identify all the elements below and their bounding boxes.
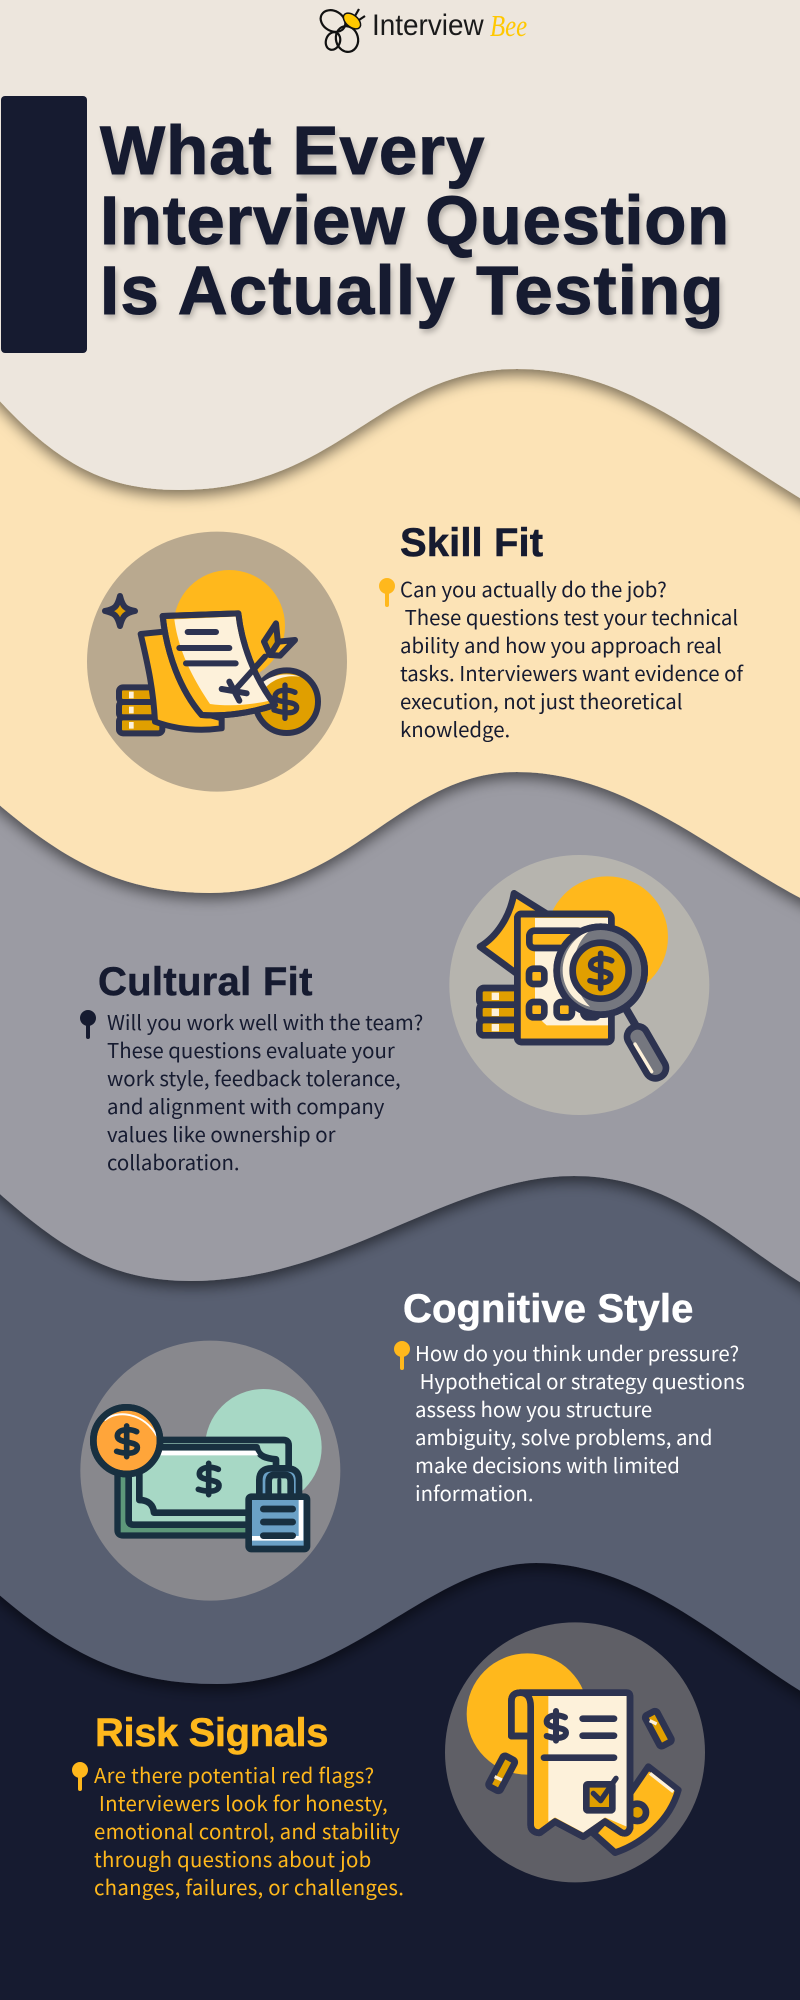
icon: pin — [394, 1341, 410, 1370]
icon: calculator with magnifier — [450, 855, 710, 1115]
title: Interview Question — [100, 182, 730, 259]
body text: Interviewers look for honesty, — [99, 1787, 388, 1817]
icon: bee — [320, 8, 366, 53]
panel: cognitive style — [80, 1287, 745, 1601]
body text: changes, failures, or challenges. — [94, 1871, 404, 1901]
body text: Can you actually do the job? — [400, 573, 667, 603]
body text — [94, 1759, 404, 1901]
body text: work style, feedback tolerance, — [107, 1062, 401, 1092]
body text: ambiguity, solve problems, and — [415, 1421, 713, 1451]
icon: pin — [72, 1762, 88, 1791]
title — [99, 112, 730, 336]
body text: assess how you structure — [415, 1393, 652, 1423]
icon: banknote with lock — [80, 1340, 340, 1601]
heading: Cultural Fit — [98, 960, 313, 1004]
heading: Cognitive Style — [403, 1287, 693, 1331]
body text: How do you think under pressure? — [415, 1337, 739, 1367]
body text: Hypothetical or strategy questions — [420, 1365, 745, 1395]
body text: knowledge. — [400, 713, 510, 743]
body text: execution, not just theoretical — [400, 685, 683, 715]
title accent bar — [1, 96, 87, 353]
panel: cultural fit — [80, 855, 710, 1176]
heading: Skill Fit — [400, 521, 543, 565]
body text: and alignment with company — [107, 1090, 384, 1120]
body text: emotional control, and stability — [94, 1815, 400, 1845]
body text: information. — [415, 1477, 534, 1507]
logo — [320, 8, 527, 53]
body text: These questions test your technical — [405, 601, 738, 631]
title: What Every — [100, 112, 485, 189]
icon: receipt with checkbox — [445, 1622, 705, 1882]
body text — [400, 573, 744, 743]
body text: These questions evaluate your — [107, 1034, 395, 1064]
panel: skill fit — [87, 521, 744, 792]
title: Is Actually Testing — [100, 252, 725, 329]
logo wordmark: Interview — [372, 9, 484, 42]
heading: Risk Signals — [95, 1711, 328, 1755]
body text: collaboration. — [107, 1146, 240, 1176]
icon: pin — [80, 1010, 96, 1039]
panel: risk signals — [72, 1622, 705, 1901]
body text — [107, 1006, 423, 1176]
body text: Will you work well with the team? — [107, 1006, 423, 1036]
icon: pin — [379, 578, 395, 607]
body text: ability and how you approach real — [400, 629, 722, 659]
body text: tasks. Interviewers want evidence of — [400, 657, 743, 687]
icon: document with arrow and coins — [87, 532, 347, 792]
body text: make decisions with limited — [415, 1449, 680, 1479]
body text: through questions about job — [94, 1843, 371, 1873]
body text: values like ownership or — [107, 1118, 336, 1148]
logo wordmark accent: Bee — [490, 8, 527, 43]
body text: Are there potential red flags? — [94, 1759, 374, 1789]
body text — [415, 1337, 745, 1507]
